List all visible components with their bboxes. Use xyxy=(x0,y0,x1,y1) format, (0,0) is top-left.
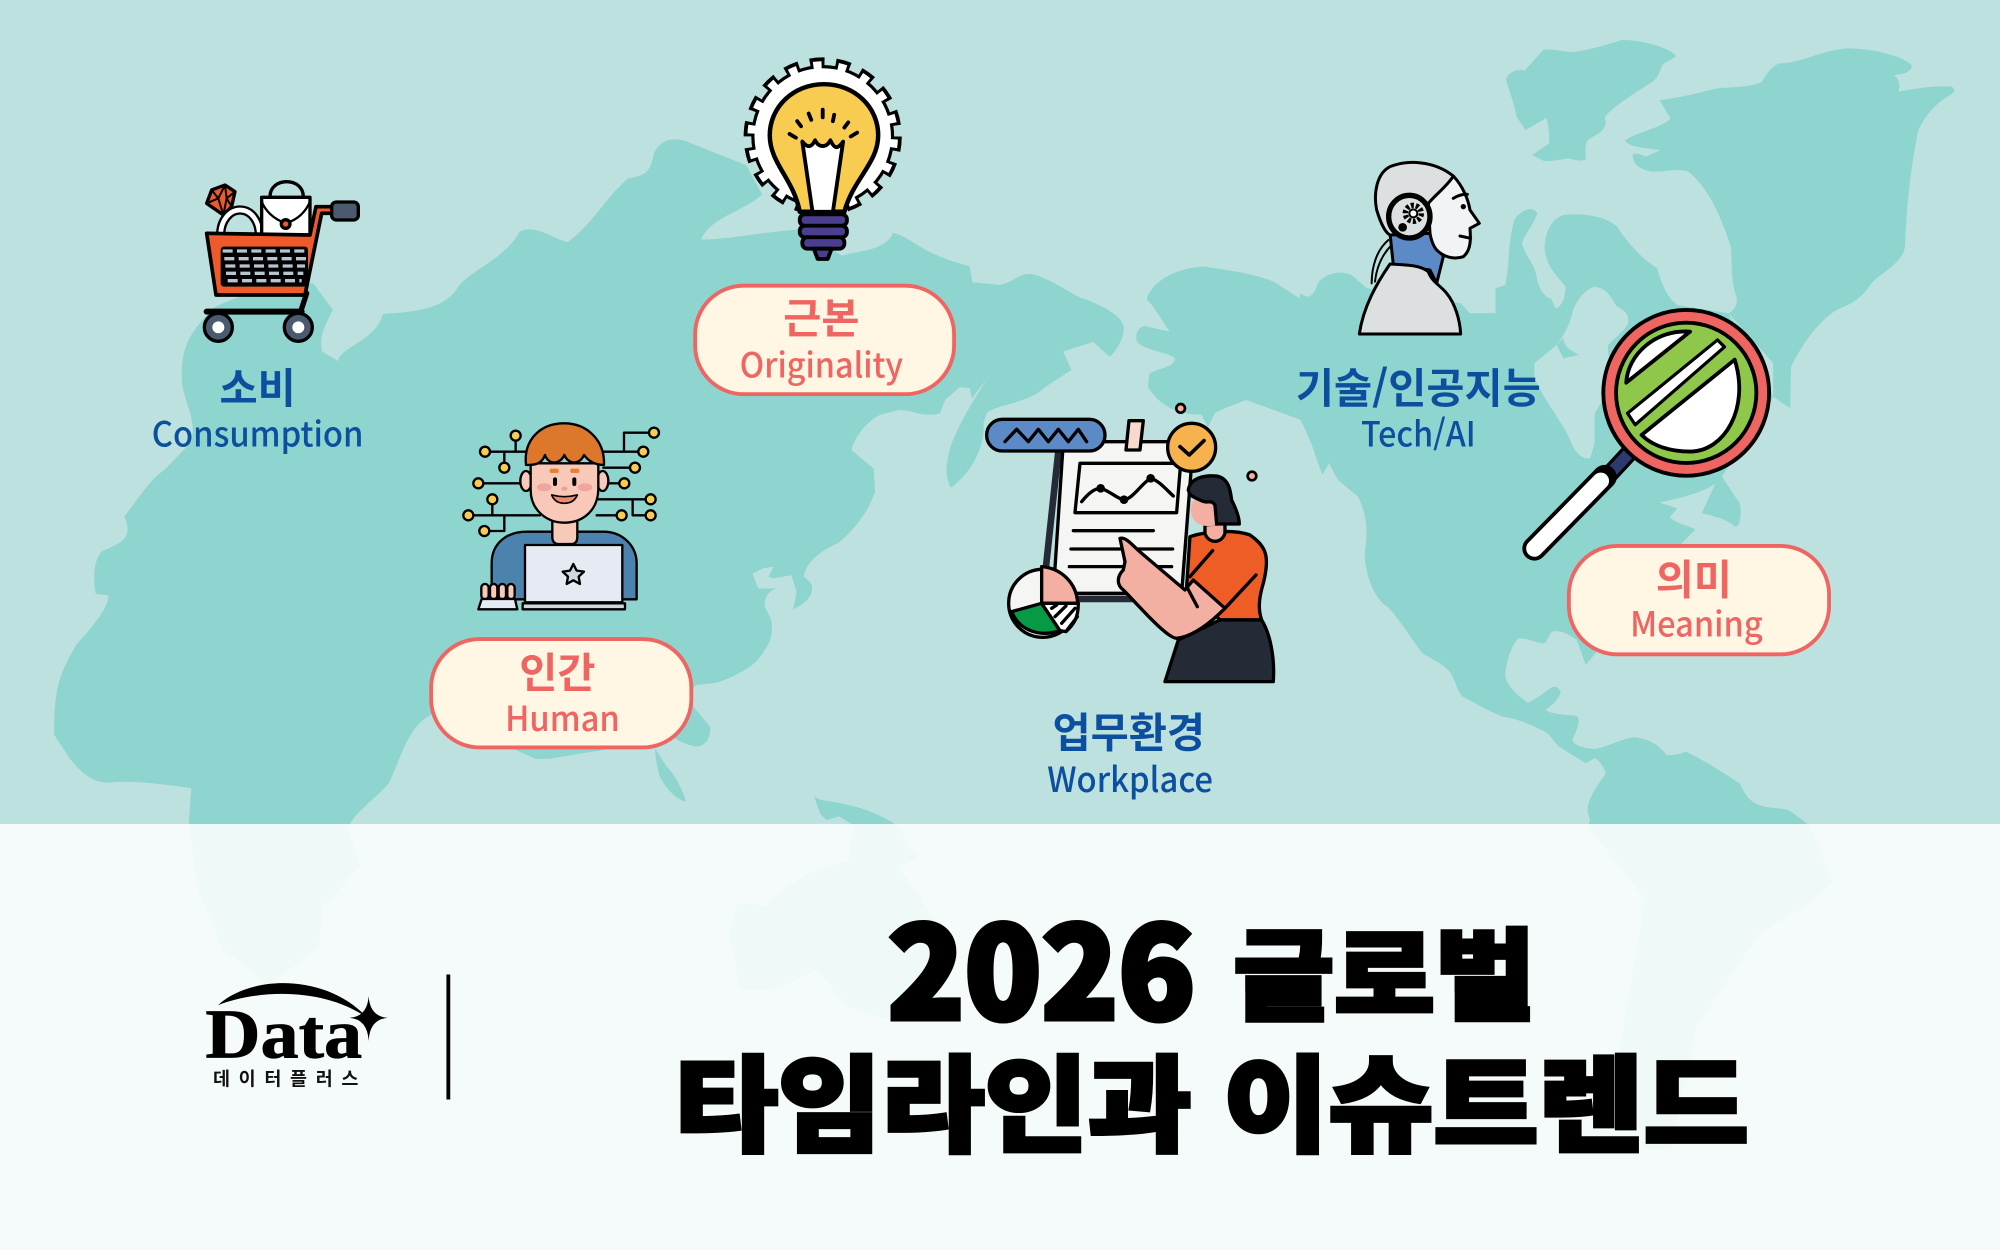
label: Consumption xyxy=(152,355,364,456)
map: Hudson Bay xyxy=(1534,287,1628,459)
facial features xyxy=(1453,194,1471,238)
person shirt xyxy=(1187,531,1267,620)
cart ring highlight xyxy=(221,210,259,235)
cart basket xyxy=(207,207,333,295)
shirt folds xyxy=(1187,551,1256,608)
green lens xyxy=(1616,323,1756,463)
check badge xyxy=(1168,423,1216,471)
person hair xyxy=(1188,476,1239,524)
lower glass xyxy=(1642,360,1739,452)
hair xyxy=(526,423,604,465)
person skirt xyxy=(1165,620,1274,682)
neck xyxy=(552,517,577,544)
map: Eurasia and Africa xyxy=(54,139,1124,985)
facial features xyxy=(537,469,592,491)
pill background xyxy=(1569,546,1829,654)
pill background xyxy=(431,639,691,747)
person arm xyxy=(1118,538,1225,638)
chart line xyxy=(1082,476,1173,502)
handle fill xyxy=(1534,481,1601,548)
cart handbag xyxy=(262,182,310,237)
map: Arctic island xyxy=(1506,40,1676,161)
handle neck xyxy=(1605,446,1635,480)
icon: shopping cart xyxy=(204,182,358,341)
map: bay peninsula xyxy=(1557,338,1579,358)
title word 이슈트렌드: 이슈트렌드 xyxy=(1223,1023,1749,1174)
ears xyxy=(520,471,608,491)
ear disk with gears xyxy=(1389,195,1430,238)
hand xyxy=(478,584,517,609)
logo arc xyxy=(218,983,367,1018)
cart wheels xyxy=(204,313,312,341)
title year: 2026 xyxy=(888,871,1195,1056)
pill: Meaning xyxy=(1569,546,1829,654)
pill: Human xyxy=(431,639,691,747)
person head xyxy=(1191,493,1222,525)
face xyxy=(531,463,598,523)
document page xyxy=(1053,442,1193,593)
English label Consumption: Consumption xyxy=(152,406,364,456)
label: Tech/AI xyxy=(1296,355,1541,456)
icon: light bulb with gear xyxy=(751,65,894,259)
pill: Originality xyxy=(695,285,954,394)
person neck xyxy=(1205,523,1225,541)
cart axle and post xyxy=(207,293,307,312)
English label Human: Human xyxy=(505,691,620,741)
Korean label 소비: 소비 xyxy=(220,355,296,415)
gear xyxy=(751,65,894,208)
map: Australia south xyxy=(730,861,950,1020)
cart grid xyxy=(221,247,308,287)
title word 글로벌: 글로벌 xyxy=(1233,896,1536,1040)
icon: AI head xyxy=(1359,162,1479,334)
logo: Data Plus xyxy=(205,983,388,1091)
decorative dots xyxy=(1176,404,1256,480)
map: Madagascar xyxy=(655,748,686,802)
bulb glass xyxy=(770,84,878,212)
map: Greenland and Canada xyxy=(1625,48,1954,408)
Korean label 업무환경: 업무환경 xyxy=(1053,699,1205,759)
circuit nodes xyxy=(463,428,659,536)
bulb rays xyxy=(790,110,857,138)
map: Americas xyxy=(1300,209,1833,1149)
label zigzag xyxy=(1005,429,1087,442)
handle neck fill xyxy=(1605,446,1635,480)
English label Originality: Originality xyxy=(740,338,903,388)
shoulders xyxy=(1359,264,1461,334)
bulb filament xyxy=(802,140,843,212)
cart diamond xyxy=(207,185,235,215)
bulb base xyxy=(800,214,847,259)
pill background xyxy=(695,286,954,394)
label bar xyxy=(987,419,1105,451)
circuit lines xyxy=(468,433,654,531)
title line 1 xyxy=(888,871,1536,1056)
pie chart xyxy=(1009,567,1078,637)
bottom white panel xyxy=(0,824,2000,1250)
title word 타임라인과: 타임라인과 xyxy=(675,1023,1191,1174)
English label Workplace: Workplace xyxy=(1047,752,1213,802)
upper glare xyxy=(1626,331,1690,383)
document shadow xyxy=(1046,452,1133,599)
text lines xyxy=(1069,531,1173,567)
English label Meaning: Meaning xyxy=(1630,596,1763,646)
cables xyxy=(1372,240,1392,283)
logo star xyxy=(349,996,388,1041)
map: Australia north xyxy=(814,797,918,867)
Korean label 기술/인공지능: 기술/인공지능 xyxy=(1296,355,1541,415)
laptop xyxy=(523,545,625,609)
face xyxy=(1428,176,1479,258)
paper clip xyxy=(1126,421,1143,450)
logo Korean name: 데이터플러스 xyxy=(213,1065,358,1091)
label: Workplace xyxy=(1047,699,1213,802)
torso xyxy=(492,532,637,599)
title line 2 xyxy=(675,1023,1749,1174)
Korean label 근본: 근본 xyxy=(783,285,860,345)
Korean label 인간: 인간 xyxy=(519,639,596,699)
divider xyxy=(446,974,450,1099)
icon: workplace person with document xyxy=(987,404,1274,682)
Korean label 의미: 의미 xyxy=(1656,546,1732,606)
icon: human with laptop xyxy=(463,423,659,609)
outer lens ring xyxy=(1603,310,1769,476)
logo wordmark: Data xyxy=(205,995,362,1073)
helmet xyxy=(1375,162,1453,235)
white stripe xyxy=(1628,340,1724,425)
title xyxy=(675,871,1749,1174)
icon: magnifying glass xyxy=(1534,310,1769,548)
cart ring xyxy=(221,210,259,235)
cart handle xyxy=(332,202,358,220)
mouth xyxy=(552,495,577,503)
English label Tech/AI: Tech/AI xyxy=(1361,406,1476,456)
map: Alaska region xyxy=(1136,267,1304,427)
handle xyxy=(1534,477,1605,548)
chart box xyxy=(1075,463,1181,513)
neck xyxy=(1390,233,1443,283)
